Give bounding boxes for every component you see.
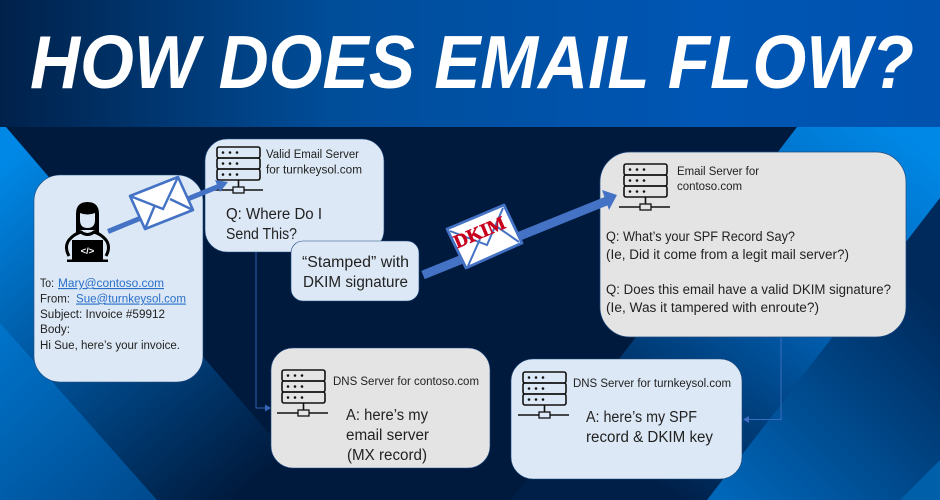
panel: valid email server bbox=[205, 139, 384, 252]
email header text: Subject: Invoice #59912 bbox=[40, 309, 165, 321]
DKIM question bbox=[606, 282, 891, 315]
background facets: left bbox=[0, 120, 326, 500]
answer text: (MX record) bbox=[347, 447, 427, 464]
panel: contoso email server bbox=[600, 152, 906, 337]
email header text: Hi Sue, here’s your invoice. bbox=[40, 340, 180, 352]
answer text: record & DKIM key bbox=[586, 429, 713, 446]
answer text: email server bbox=[346, 427, 429, 444]
email header text: Mary@contoso.com bbox=[58, 278, 164, 290]
icon: envelope bbox=[130, 177, 193, 229]
icon: DKIM stamped envelope: DKIM bbox=[451, 213, 509, 253]
server label: DNS Server for contoso.com bbox=[333, 376, 479, 388]
panel: email message bbox=[34, 175, 203, 382]
title banner bbox=[0, 0, 940, 127]
server label: DNS Server for turnkeysol.com bbox=[573, 378, 731, 390]
answer text bbox=[346, 407, 429, 464]
answer text: A: here’s my bbox=[346, 407, 428, 424]
server label bbox=[266, 149, 362, 176]
panel: stamped callout bbox=[291, 241, 419, 301]
server label: Email Server for bbox=[677, 166, 759, 178]
email header text: Body: bbox=[40, 324, 70, 336]
question text: Send This? bbox=[226, 226, 297, 243]
email header text bbox=[40, 278, 186, 352]
server label bbox=[677, 166, 759, 193]
server label: for turnkeysol.com bbox=[266, 164, 362, 176]
question text: Q: Where Do I bbox=[226, 206, 322, 223]
answer text: A: here’s my SPF bbox=[586, 409, 697, 426]
server label: Valid Email Server bbox=[266, 149, 359, 161]
server label: contoso.com bbox=[677, 181, 742, 193]
question text bbox=[226, 206, 322, 243]
SPF question: Q: What’s your SPF Record Say? bbox=[606, 229, 795, 244]
DKIM question: (Ie, Was it tampered with enroute?) bbox=[606, 300, 819, 315]
arrow: DKIM stamp to contoso server bbox=[423, 190, 617, 275]
icon: server bbox=[212, 147, 263, 193]
SPF question bbox=[606, 229, 849, 262]
icon: server bbox=[277, 370, 328, 416]
icon: person at laptop: </> bbox=[81, 246, 95, 257]
answer text bbox=[586, 409, 713, 446]
arrow: sender to valid server with envelope bbox=[108, 177, 228, 232]
connector: contoso server to turnkeysol DNS bbox=[743, 337, 781, 423]
email header text: Sue@turnkeysol.com bbox=[76, 294, 186, 306]
email header text: From: bbox=[40, 294, 70, 306]
icon: DKIM stamped envelope bbox=[447, 205, 522, 268]
background facets: right bbox=[511, 127, 940, 500]
panel: DNS server for turnkeysol bbox=[511, 359, 742, 479]
icon: server bbox=[518, 372, 569, 418]
DKIM question: Q: Does this email have a valid DKIM signature? bbox=[606, 282, 891, 297]
SPF question: (Ie, Did it come from a legit mail server?) bbox=[606, 247, 849, 262]
icon: server bbox=[619, 164, 670, 210]
email header text: To: bbox=[40, 278, 54, 290]
panel: stamped callout: DKIM signature bbox=[303, 274, 408, 291]
panel: DNS server for contoso bbox=[271, 348, 490, 468]
connector: valid server to contoso DNS bbox=[256, 252, 271, 412]
panel: stamped callout: “Stamped” with bbox=[302, 254, 409, 271]
icon: person at laptop bbox=[66, 202, 108, 262]
